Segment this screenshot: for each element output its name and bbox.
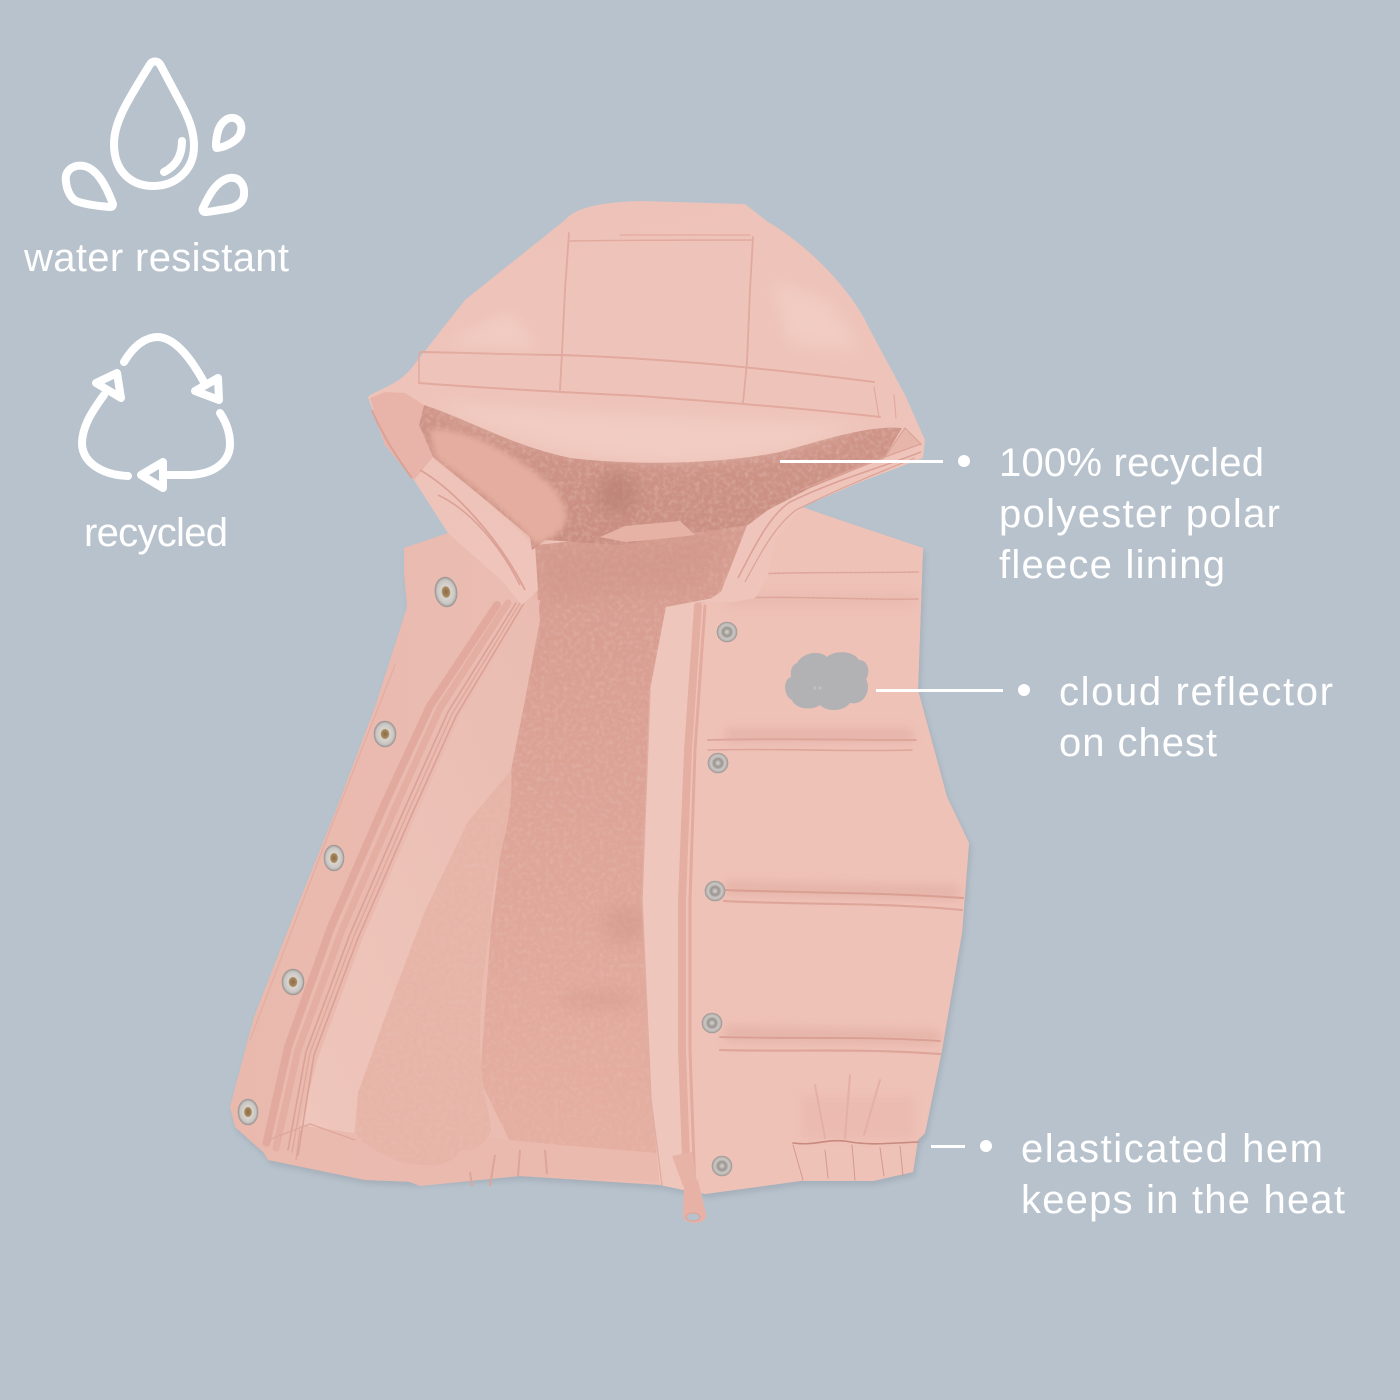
right quilting seams: [708, 572, 963, 1054]
callout: cloud reflector: cloud reflector: [1059, 670, 1333, 714]
hood shell: [368, 201, 925, 607]
right snap studs: [702, 622, 737, 1176]
vest illustration: [230, 201, 971, 1223]
fleece soft shadows: [540, 535, 730, 1008]
right front panel: [680, 507, 969, 1194]
callout: fleece lining: [780, 441, 1280, 587]
icon: water drops: [66, 62, 244, 212]
hood brim left turn-back and edge: [370, 392, 921, 590]
left fleece facing: [356, 770, 512, 1166]
right panel seam shading: [725, 590, 960, 1140]
soft drop shadow: [232, 511, 971, 1198]
label: water resistant: water resistant: [23, 236, 289, 280]
fleece folds inside hood: [430, 430, 695, 545]
right zipper: [642, 606, 705, 1190]
callout: cloud reflector: [876, 670, 1333, 765]
callout: cloud reflector: on chest: [1059, 721, 1217, 765]
bottom hem band: [380, 1138, 660, 1186]
label: recycled: recycled: [84, 511, 228, 555]
left front panel lining sheen: [300, 600, 540, 1133]
centre fleece lining: [480, 522, 750, 1160]
callout: elasticated hem: [931, 1127, 1345, 1222]
right placket beside zipper: [642, 602, 700, 1192]
hood fleece interior: [419, 405, 902, 550]
zipper pull: [672, 1152, 706, 1223]
callout: fleece lining: fleece lining: [999, 543, 1225, 587]
left snap eyelets: [238, 576, 459, 1125]
callout: elasticated hem: keeps in the heat: [1021, 1178, 1345, 1222]
icon: recycling arrows: [82, 337, 230, 488]
body silhouette: [230, 507, 969, 1194]
callout: fleece lining: 100% recycled: [999, 441, 1264, 485]
callout: elasticated hem: elasticated hem: [1021, 1127, 1323, 1171]
hood sheen highlights: [430, 280, 860, 461]
cloud reflector: [785, 652, 868, 710]
hood quilting seams: [419, 233, 896, 418]
callout: fleece lining: polyester polar: [999, 492, 1280, 536]
elastic hem gathers: [793, 1075, 918, 1180]
left lower corner hem seam: [268, 1124, 355, 1160]
left zipper and stitching: [250, 603, 524, 1155]
